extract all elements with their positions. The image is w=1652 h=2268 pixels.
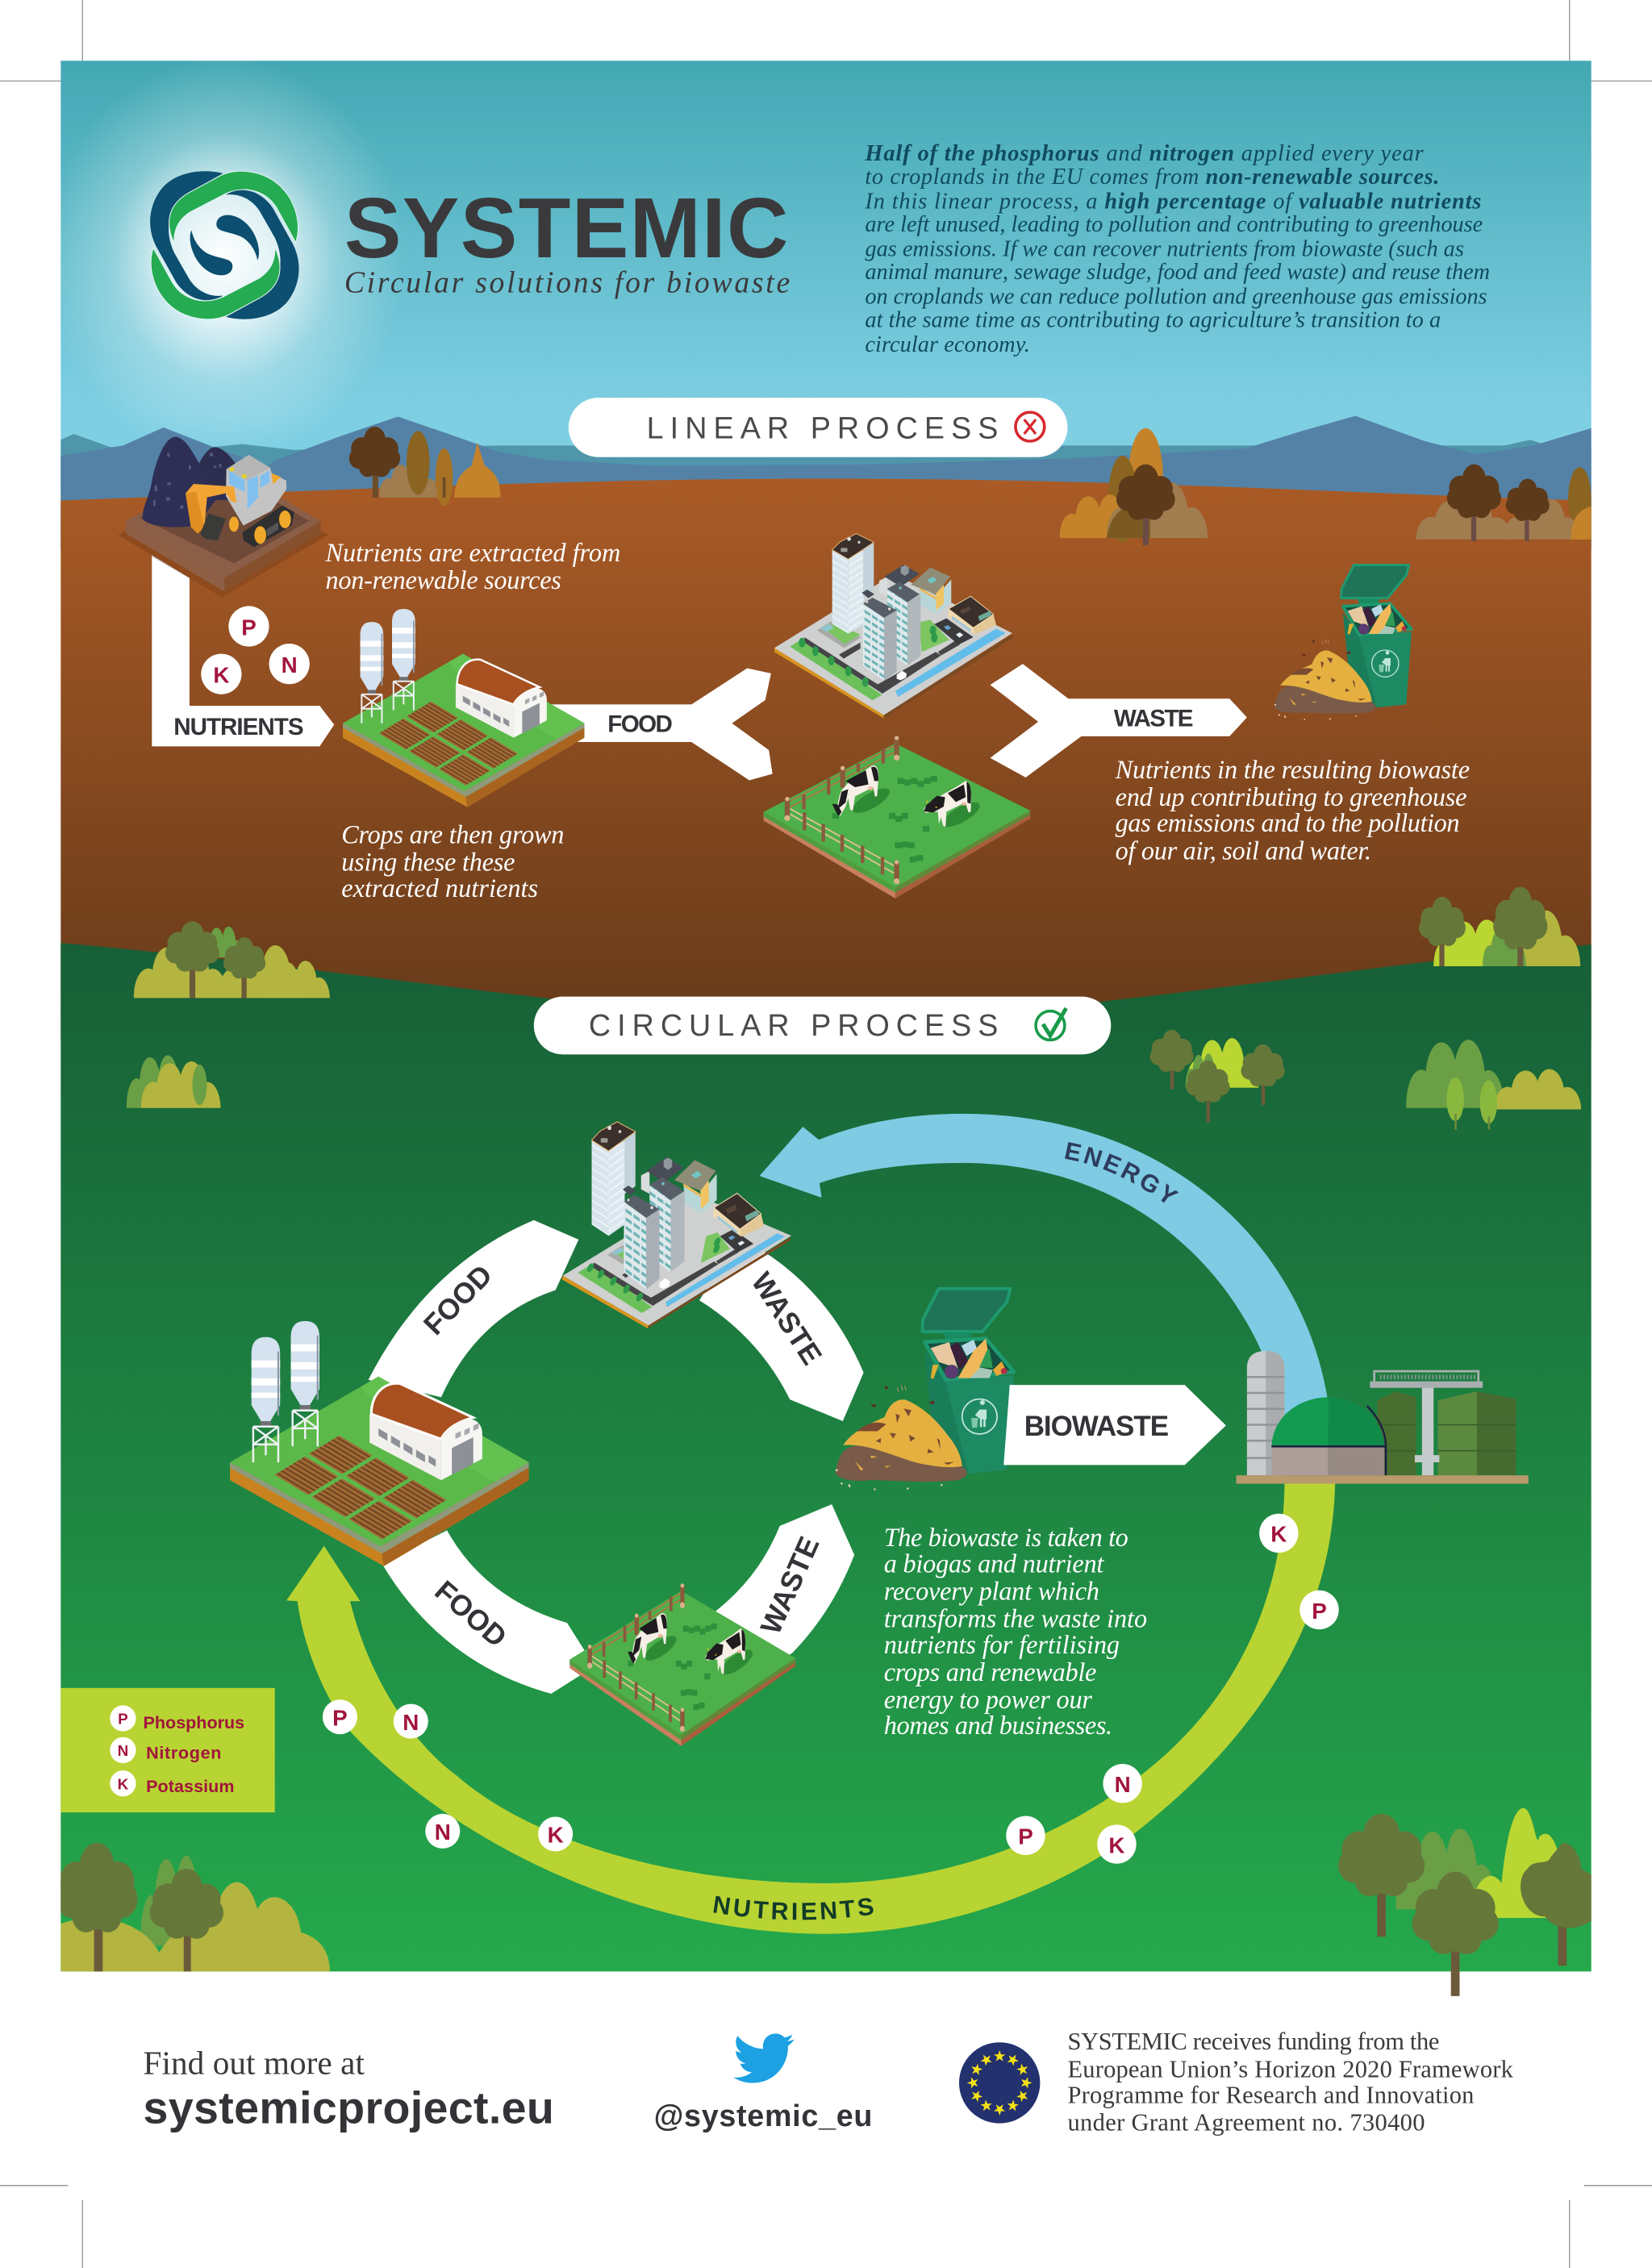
caption: crops: Crops are then grown <box>341 820 564 849</box>
arrow: nutrients: NUTRIENTS <box>173 714 304 740</box>
arrow: food to city <box>369 1220 578 1397</box>
footer: funding statement: under Grant Agreement no. 730400 <box>1067 2109 1425 2137</box>
nutrient badges on the arc: K <box>1270 1522 1287 1547</box>
trees: centre hill group <box>1060 428 1208 545</box>
intro paragraph: to croplands in the EU comes from non-renewable sources. <box>865 165 1439 190</box>
icon: twitter bird <box>733 2033 795 2083</box>
footer: find out more: systemicproject.eu <box>144 2083 554 2133</box>
footer: funding statement: European Union’s Horizon 2020 Framework <box>1067 2055 1514 2082</box>
icon: EU flag <box>959 2042 1040 2124</box>
arrow: food fork <box>549 669 773 781</box>
intro paragraph: at the same time as contributing to agriculture’s transition to a <box>865 307 1441 332</box>
intro paragraph: are left unused, leading to pollution and contributing to greenhouse <box>865 212 1483 237</box>
legend: Potassium <box>146 1777 235 1796</box>
arrow: nutrients <box>152 551 334 746</box>
caption: biowaste plant: a biogas and nutrient <box>884 1549 1104 1578</box>
pill: circular process <box>534 997 1111 1054</box>
caption: biowaste pollution: of our air, soil and water. <box>1116 836 1371 865</box>
arrow: energy <box>760 1113 1328 1424</box>
trees: meadow edge left <box>134 921 330 998</box>
nutrient badges: P <box>241 615 257 640</box>
legend: P <box>118 1711 128 1728</box>
caption: biowaste plant: The biowaste is taken to <box>884 1523 1128 1552</box>
intro paragraph <box>864 141 1490 357</box>
title: SYSTEMIC: SYSTEMIC <box>344 181 788 276</box>
nutrient badges on the arc: N <box>403 1710 419 1735</box>
logo: SYSTEMIC interlocking loops <box>150 171 299 319</box>
arrow: biowaste: BIOWASTE <box>1024 1411 1169 1442</box>
caption: biowaste pollution: end up contributing to greenhouse <box>1116 782 1466 811</box>
illustration: cow pasture <box>569 1583 795 1746</box>
arrow: waste from pasture <box>695 1504 854 1685</box>
legend <box>60 1688 275 1812</box>
arrow: waste from city: WASTE <box>745 1267 828 1370</box>
caption: biowaste plant: transforms the waste into <box>884 1604 1147 1633</box>
intro paragraph: circular economy. <box>865 332 1030 357</box>
footer: funding statement: Programme for Research and Innovation <box>1067 2082 1474 2109</box>
subtitle: Circular solutions for biowaste <box>344 265 790 299</box>
arrow: waste from city <box>699 1236 864 1421</box>
nutrient badges on the arc: K <box>1108 1832 1125 1857</box>
arrow: food to pasture: FOOD <box>428 1574 513 1653</box>
caption: biowaste plant: recovery plant which <box>884 1576 1099 1605</box>
trees: left hill group <box>349 427 500 507</box>
footer: find out more: Find out more at <box>144 2045 365 2082</box>
arrow: nutrients: NUTRIENTS <box>713 1895 874 1920</box>
arrow: waste fork <box>991 664 1247 778</box>
pill: linear process: LINEAR PROCESS <box>647 411 998 444</box>
nutrient badges on the arc: K <box>548 1823 564 1848</box>
intro paragraph: animal manure, sewage sludge, food and feed waste) and reuse them <box>865 260 1490 285</box>
illustration: city <box>774 534 1012 719</box>
arrow: food to city: FOOD <box>417 1259 499 1341</box>
legend: Nitrogen <box>146 1744 221 1763</box>
nutrient badges on the arc: P <box>1312 1599 1327 1624</box>
nutrient badges: N <box>282 652 298 677</box>
caption: biowaste pollution: gas emissions and to the pollution <box>1116 808 1459 837</box>
trees: bottom right <box>1338 1808 1592 1996</box>
caption: biowaste pollution <box>1115 755 1470 865</box>
trees: meadow edge right <box>1419 886 1580 966</box>
nutrient badges: K <box>213 662 229 687</box>
legend: Phosphorus <box>144 1713 244 1732</box>
caption: crops <box>341 820 564 903</box>
illustration: crop farm <box>343 609 585 807</box>
nutrient badges on the arc <box>323 1514 1339 1864</box>
icon: red cross <box>1016 412 1045 441</box>
trees: right hill group <box>1416 465 1592 541</box>
intro paragraph: gas emissions. If we can recover nutrients from biowaste (such as <box>865 236 1464 261</box>
illustration: waste bin and pile <box>1274 565 1412 719</box>
bushes: upper left meadow <box>127 1055 220 1108</box>
illustration: biogas and nutrient recovery plant <box>1237 1351 1529 1484</box>
legend: N <box>118 1742 128 1759</box>
nutrient badges <box>201 606 310 694</box>
caption: biowaste plant: nutrients for fertilising <box>884 1630 1120 1659</box>
nutrient badges on the arc: N <box>1115 1772 1131 1797</box>
caption: biowaste plant: crops and renewable <box>884 1657 1096 1686</box>
intro paragraph: Half of the phosphorus and nitrogen applied every year <box>864 141 1425 166</box>
nutrient badges on the arc: P <box>332 1705 348 1730</box>
intro paragraph: on croplands we can reduce pollution and greenhouse gas emissions <box>865 285 1487 310</box>
footer: twitter handle: @systemic_eu <box>654 2099 872 2133</box>
nutrient badges on the arc: N <box>435 1820 451 1845</box>
arrow: energy: ENERGY <box>1065 1142 1179 1203</box>
caption: biowaste plant <box>884 1523 1147 1740</box>
icon: green check <box>1036 1008 1066 1040</box>
caption: biowaste plant: energy to power our <box>884 1685 1092 1714</box>
footer: funding statement: SYSTEMIC receives funding from the <box>1067 2028 1439 2055</box>
arrow: food fork: FOOD <box>607 711 673 737</box>
caption: biowaste plant: homes and businesses. <box>884 1711 1112 1740</box>
caption: biowaste pollution: Nutrients in the resulting biowaste <box>1115 755 1470 784</box>
legend: K <box>118 1775 129 1792</box>
caption: nutrients extracted: Nutrients are extracted from <box>325 538 620 567</box>
caption: nutrients extracted: non-renewable sources <box>326 565 561 594</box>
caption: crops: extracted nutrients <box>341 873 538 903</box>
arrow: waste fork: WASTE <box>1114 705 1194 732</box>
illustration: cow pasture <box>764 736 1030 898</box>
arrow: food to pasture <box>382 1530 594 1694</box>
caption: crops: using these these <box>341 848 515 877</box>
illustration: waste bin and pile <box>836 1289 1014 1490</box>
trees: upper right meadow <box>1406 1040 1581 1130</box>
intro paragraph: In this linear process, a high percentage of valuable nutrients <box>864 189 1481 214</box>
trees: bottom left <box>56 1843 330 1971</box>
trees: upper centre meadow <box>1150 1030 1285 1123</box>
footer: funding statement <box>1067 2028 1514 2137</box>
pill: linear process <box>569 398 1067 457</box>
source: coal mine with excavator <box>119 437 328 598</box>
arrow: waste from pasture: WASTE <box>754 1532 826 1639</box>
footer: find out more <box>144 2045 554 2133</box>
illustration: city <box>544 1122 807 1340</box>
background: sky, land and meadow <box>44 58 1592 1971</box>
arrow: biowaste <box>1003 1385 1226 1465</box>
illustration: crop farm <box>230 1321 529 1566</box>
arrow: nutrients <box>286 1484 1336 1934</box>
nutrient badges on the arc: P <box>1018 1824 1033 1849</box>
caption: nutrients extracted <box>325 538 620 594</box>
pill: circular process: CIRCULAR PROCESS <box>589 1008 998 1042</box>
